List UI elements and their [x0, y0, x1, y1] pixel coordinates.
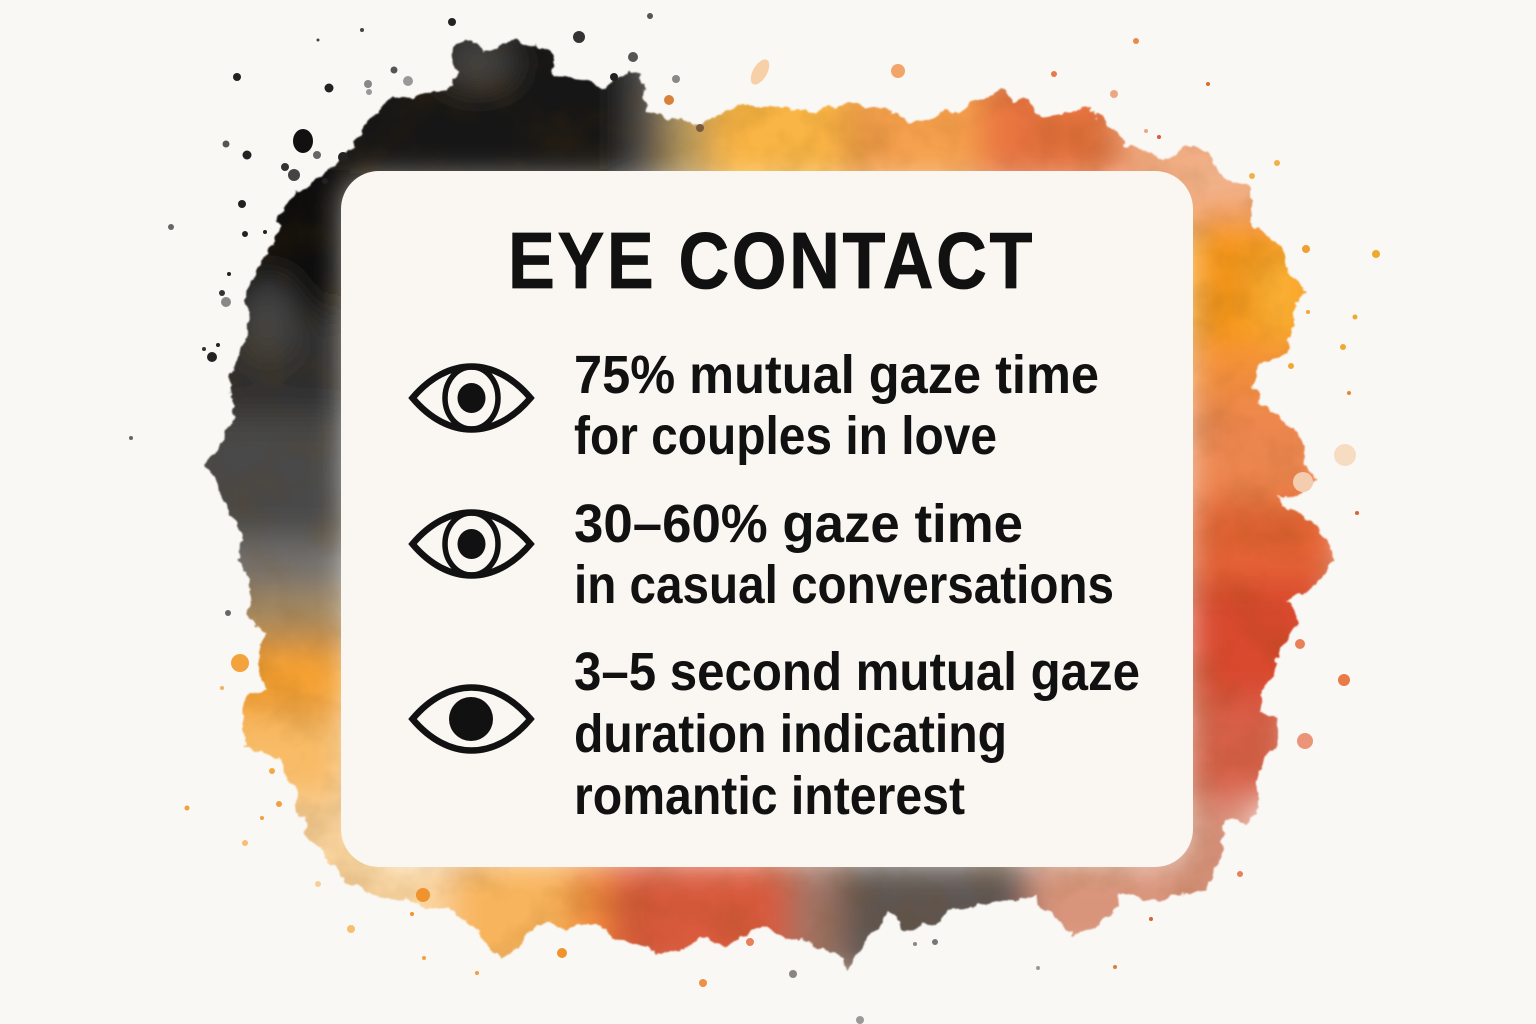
panel: eye contact card — [341, 171, 1193, 867]
icon: eye with ringed pupil 1 — [412, 366, 530, 430]
text: stat 3: 3–5 second mutual gaze — [574, 642, 1140, 702]
icon: eye with solid pupil — [412, 688, 530, 750]
text: stat 2: 30–60% gaze time — [574, 494, 1023, 554]
text: stat 3: romantic interest — [574, 766, 965, 826]
text: stat 1: for couples in love — [574, 406, 997, 466]
text: stat 1 — [574, 345, 1099, 466]
title: EYE CONTACT — [508, 216, 1035, 305]
watercolor splash background — [203, 38, 1336, 972]
text: stat 3 — [574, 642, 1140, 826]
text: stat 2: in casual conversations — [574, 555, 1114, 615]
text: stat 1: 75% mutual gaze time — [574, 345, 1099, 405]
text: stat 3: duration indicating — [574, 704, 1007, 764]
text: stat 2 — [574, 494, 1114, 615]
icon: eye with ringed pupil 2 — [412, 512, 530, 576]
